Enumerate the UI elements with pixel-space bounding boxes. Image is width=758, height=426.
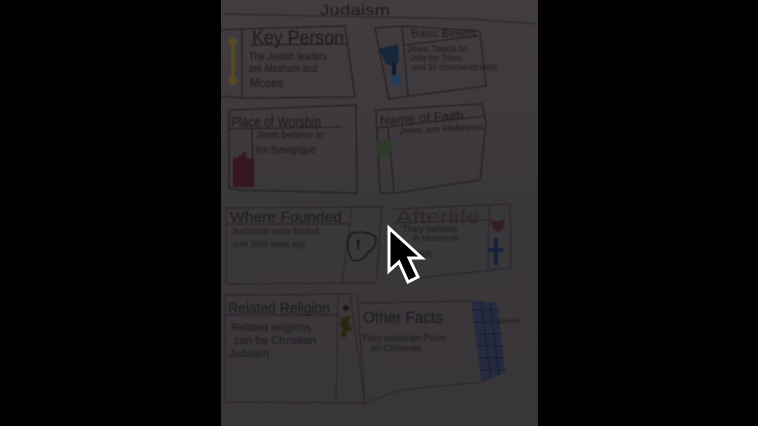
panel: place of worship [229,105,357,193]
text: key person body: are Abraham and [249,63,317,75]
icon: green face [376,140,392,158]
title: Judaism [320,2,390,19]
text: key person body [249,51,327,90]
heading: afterlife: Afterlife [396,207,480,227]
text: place of worship body: Jews believe in [256,129,324,141]
icon: blue figure [379,44,402,86]
panel: afterlife [393,204,511,279]
text: reform religion body: Judaism [229,348,269,360]
text: afterlife body: in heaven or [413,233,459,243]
text: basic beliefs body: and 10 commandments [412,62,497,72]
heading: basic beliefs: Basic Beliefs [411,28,477,40]
text: key person body: The Jewish leaders [249,51,327,63]
text: key person body: Moses [250,76,283,90]
heading: key person: Key Person [252,28,344,49]
panel: basic beliefs [375,26,497,99]
icon: red synagogue [233,152,254,187]
text: holy book body: Jews are Hebrews [399,122,485,136]
heading: reform religion: Related Religion [228,300,330,317]
panel: key person [221,26,355,98]
panel: reform religion [225,293,365,403]
text: place of worship body [256,129,324,156]
icon: map with question mark [348,232,376,261]
text: basic beliefs body [407,44,497,72]
title [223,2,538,24]
icon: red devil [490,218,505,232]
panel: other facts [360,301,521,403]
text: reform religion body [229,322,316,360]
text: other facts body: They celebrate Purim [362,333,447,343]
text: other facts body: on Chrismas [371,343,421,353]
text: where founded body [231,226,319,249]
text: afterlife body: hell [417,249,431,259]
icon: blue flag grid [472,301,505,383]
paper sheet [221,0,538,426]
text: place of worship body: the Synagogue [256,144,316,156]
text: reform religion body: Related religions [231,322,311,334]
heading: where founded: Where Founded [230,209,342,226]
icon: yellow figure [340,305,352,338]
text: where founded body: over 3000 years ago [233,239,305,249]
icon: blue cross [488,238,503,265]
panel: holy book [376,104,486,193]
heading: holy book: Name of Faith [379,108,464,128]
text: other facts body [362,333,447,353]
icon: mouse cursor [389,228,422,282]
text: where founded body: Judaism was found [231,226,319,236]
heading: place of worship: Place of Worship [231,114,321,131]
text: flag caption: Israel [498,318,521,325]
text: afterlife body [402,224,459,259]
icon: map with question mark: ! [356,237,360,252]
text: afterlife body: They believe [402,224,458,234]
text: basic beliefs body: Jews Teach to [407,44,467,54]
text: reform religion body: can be Christian [234,335,316,347]
icon: yellow scroll [228,38,238,86]
text: basic beliefs body: Unite the Tribes [409,53,462,63]
heading: other facts: Other Facts [363,308,443,327]
panel: where founded [226,207,382,284]
